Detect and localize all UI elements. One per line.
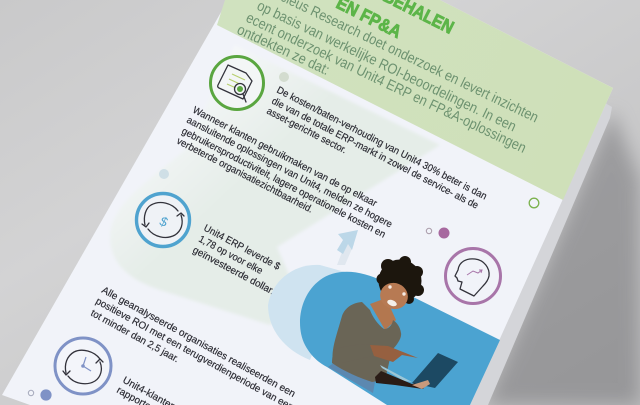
green header band	[217, 0, 613, 200]
text block: Unit4 ERP return: Unit4 ERP leverde $	[202, 223, 282, 273]
text block: productivity: verbeterde organisatiezichtbaarheid.	[175, 136, 315, 216]
text block: cost benefit: De kosten/baten-verhouding van Unit4 30% beter is dan	[275, 85, 488, 202]
text block: productivity: aansluitende oplossingen van Unit4, melden ze hogere	[185, 115, 394, 231]
icon: document with magnifier	[210, 56, 264, 110]
decorative dots periwinkle	[28, 389, 52, 401]
text block: Unit4 ERP return: geïnvesteerde dollar.	[191, 245, 276, 297]
illustration: woman with laptop	[328, 256, 458, 393]
arm and hand pointing	[332, 344, 374, 363]
hair	[376, 256, 424, 304]
text block: payback period: tot minder dan 2,5 jaar.	[89, 308, 181, 365]
text block: cost benefit: asset-gerichte sector.	[265, 106, 348, 156]
body	[332, 302, 401, 382]
pale green background shape	[110, 45, 440, 325]
forearm under laptop	[375, 371, 430, 389]
icon: clock cycle	[55, 338, 111, 394]
jeans	[328, 362, 375, 393]
neck	[370, 298, 396, 330]
intro text: ontdekten ze dat:	[234, 22, 332, 79]
icon: dollar cycle: $	[157, 213, 170, 230]
face	[376, 279, 412, 313]
text block: cost benefit: die van de totale ERP-markt in zowel de service- als de	[270, 96, 480, 212]
text block: productivity: Wanneer klanten gebruikmaken van de op elkaar	[191, 105, 379, 210]
laptop screen	[412, 353, 458, 388]
eyes and smile	[388, 285, 392, 289]
decorative dots purple	[426, 228, 450, 238]
icon: dollar cycle	[136, 194, 190, 246]
icon: head with trend arrow	[446, 248, 500, 304]
text block: payback period: Alle geanalyseerde organisaties realiseerden een	[100, 285, 297, 400]
intro text: ecent onderzoek van Unit4 ERP en FP&A-oplossingen	[243, 10, 528, 157]
pale blue shape	[268, 265, 345, 360]
blue shape	[300, 272, 500, 405]
text block: productivity: gebruikersproductiviteit, lagere operationele kosten en	[180, 126, 387, 241]
paper shadow	[485, 110, 640, 405]
icon: pale upward arrow	[337, 230, 358, 265]
title	[333, 0, 457, 42]
intro text: op basis van werkelijke ROI-beoordelingen. In een	[254, 0, 518, 135]
decorative ring green	[529, 198, 539, 208]
text block: Unit4 ERP return: 1,78 op voor elke	[197, 234, 265, 277]
decorative dot grey	[279, 72, 289, 82]
supporting hand	[412, 380, 430, 389]
decorative dot blue	[159, 169, 169, 179]
page stack edge	[470, 100, 612, 405]
text block: Unit4 ERP return	[191, 223, 282, 297]
laptop base	[380, 365, 412, 382]
